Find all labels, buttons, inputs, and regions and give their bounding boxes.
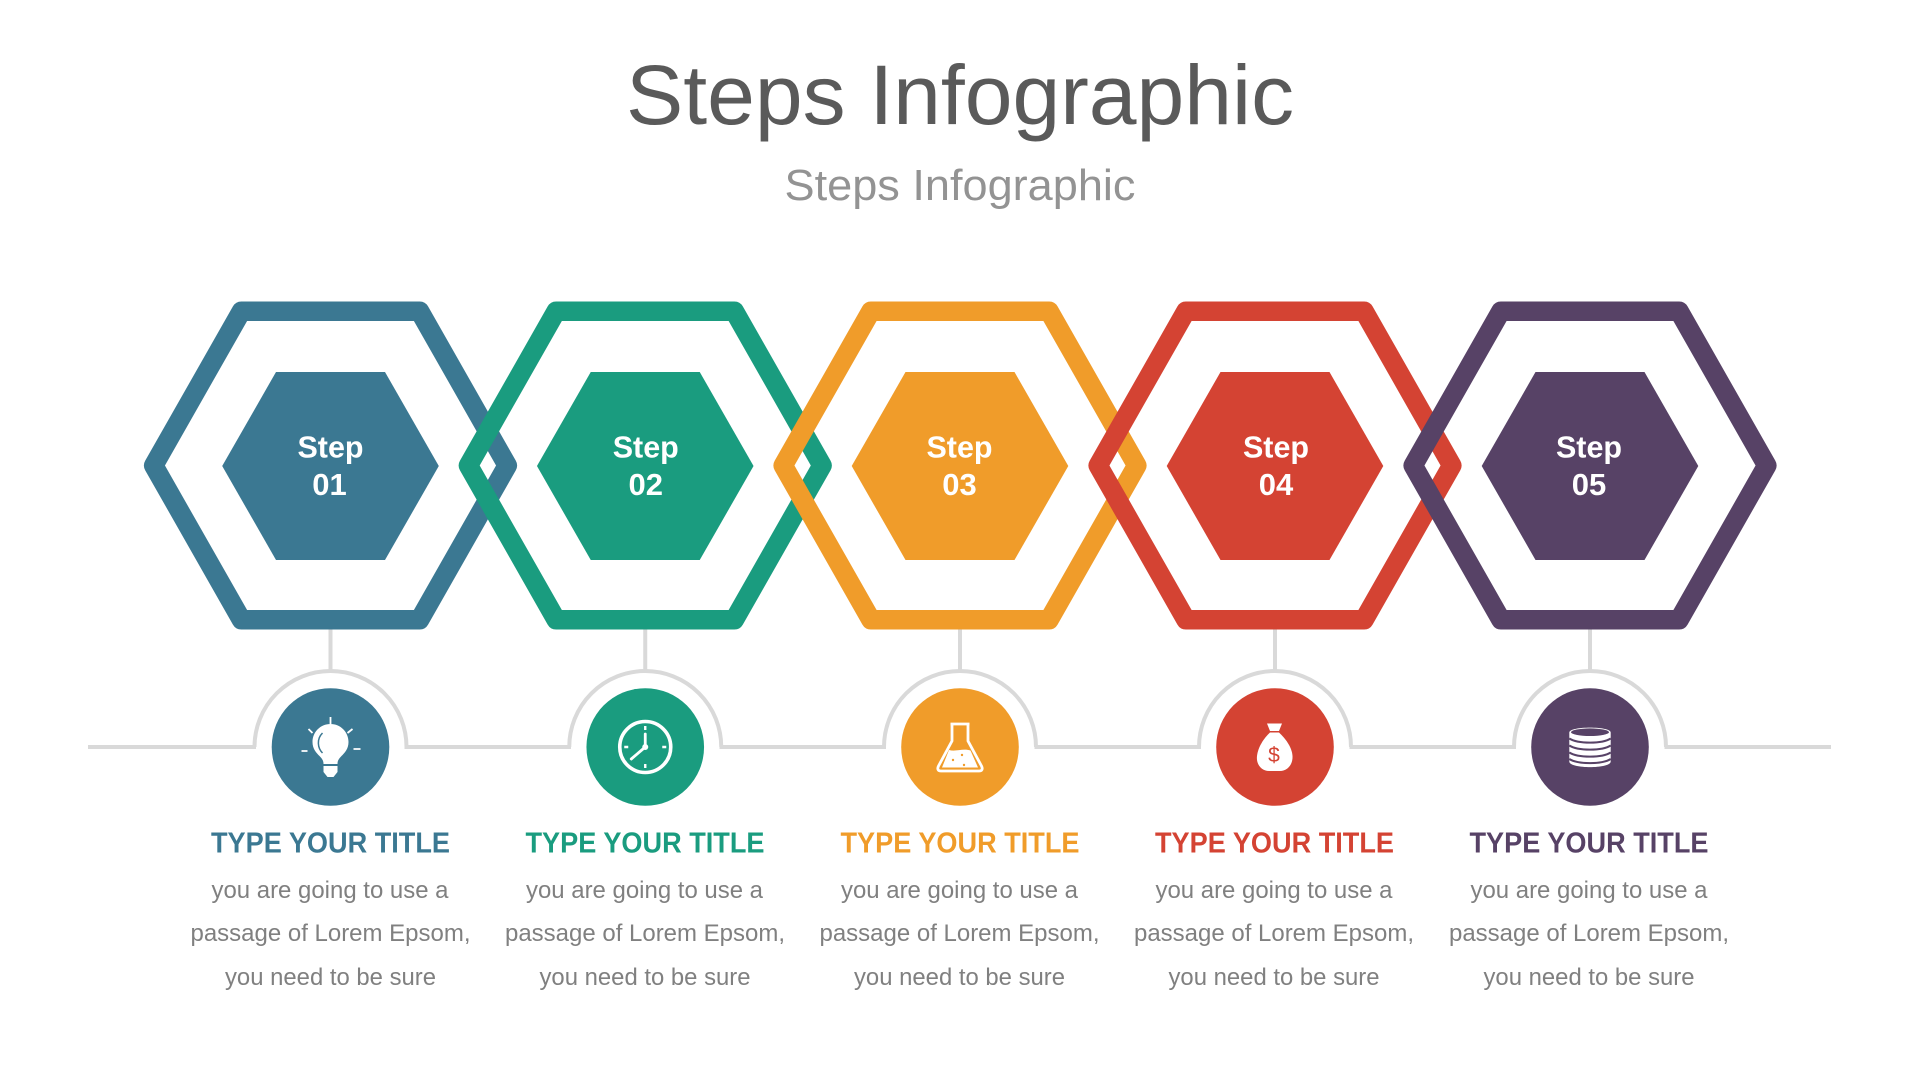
- step 4 description: you need to be sure: [1168, 964, 1380, 991]
- outer hexagon ring: [1098, 311, 1452, 620]
- step 3 description: you are going to use a: [841, 877, 1078, 904]
- inner hexagon: [1482, 372, 1698, 560]
- outer hexagon ring: [783, 311, 1137, 620]
- title: Steps Infographic: [626, 48, 1294, 142]
- step 5 description: passage of Lorem Epsom,: [1449, 920, 1729, 947]
- step 2 description: you are going to use a: [526, 877, 763, 904]
- step 5 hexagons: [1413, 311, 1767, 620]
- icon: light bulb: [272, 688, 389, 806]
- outer hexagon ring: [1413, 311, 1767, 620]
- outer hexagon ring: [154, 311, 507, 620]
- inner hexagon: [537, 372, 754, 560]
- step number: 01: [312, 467, 347, 502]
- step label: Step: [926, 430, 992, 464]
- subtitle: Steps Infographic: [784, 161, 1136, 210]
- connector timeline: [88, 629, 1831, 747]
- step 5 description: [1449, 877, 1729, 991]
- step 4 description: passage of Lorem Epsom,: [1134, 920, 1414, 947]
- icon: clock: [586, 688, 704, 806]
- step 1 title: TYPE YOUR TITLE: [211, 828, 450, 860]
- step 2 description: passage of Lorem Epsom,: [505, 920, 785, 947]
- step number: 02: [629, 467, 663, 502]
- icon: money bag: $: [1268, 744, 1280, 767]
- icon: flask: [901, 688, 1019, 806]
- step label: Step: [1556, 430, 1622, 464]
- step 4 description: [1134, 877, 1414, 991]
- step 1 description: you are going to use a: [212, 877, 449, 904]
- step label: Step: [1243, 430, 1309, 464]
- step 5 description: you need to be sure: [1484, 964, 1694, 991]
- step label: Step: [613, 430, 679, 464]
- step 1 description: [190, 877, 470, 991]
- step 2 description: you need to be sure: [540, 964, 750, 991]
- step 4 description: you are going to use a: [1156, 877, 1393, 904]
- icon: coin stack: [1531, 688, 1649, 806]
- inner hexagon: [222, 372, 439, 560]
- icon: money bag: [1216, 688, 1334, 806]
- step 3 title: TYPE YOUR TITLE: [840, 828, 1080, 860]
- inner hexagon: [852, 372, 1068, 560]
- outer hexagon ring: [468, 311, 822, 620]
- step 2 description: [505, 877, 785, 991]
- step number: 04: [1259, 467, 1294, 502]
- step 3 description: [820, 877, 1100, 991]
- step 4 title: TYPE YOUR TITLE: [1155, 828, 1394, 860]
- step 2 title: TYPE YOUR TITLE: [526, 828, 764, 860]
- step 5 title: TYPE YOUR TITLE: [1470, 828, 1708, 860]
- step 5 description: you are going to use a: [1470, 877, 1708, 904]
- inner hexagon: [1167, 372, 1383, 560]
- step number: 05: [1572, 467, 1606, 502]
- step 1 description: passage of Lorem Epsom,: [190, 920, 470, 947]
- step 1 description: you need to be sure: [225, 964, 436, 991]
- step 3 description: passage of Lorem Epsom,: [820, 920, 1100, 947]
- step 2 hexagons: [468, 311, 822, 620]
- step number: 03: [942, 467, 977, 502]
- step 3 hexagons: [783, 311, 1137, 620]
- step 3 description: you need to be sure: [854, 964, 1065, 991]
- step 1 hexagons: [154, 311, 507, 620]
- step 4 hexagons: [1098, 311, 1452, 620]
- step label: Step: [298, 430, 364, 464]
